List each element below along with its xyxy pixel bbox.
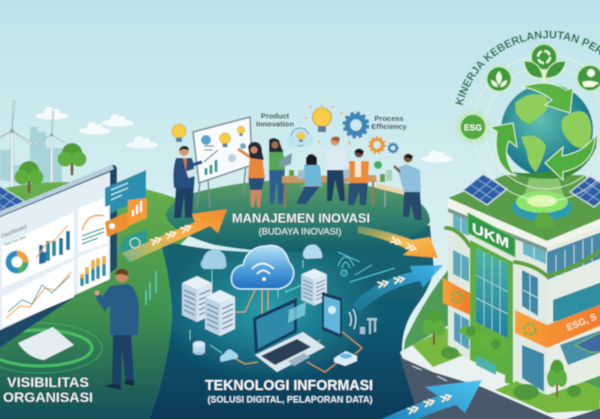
sparkles around bulb bbox=[305, 105, 350, 145]
servers bbox=[182, 269, 327, 336]
icon: bulb left bbox=[172, 124, 186, 142]
sprout bbox=[524, 61, 566, 82]
recycling arrows bbox=[490, 83, 597, 180]
UKM sign bbox=[468, 213, 515, 257]
sensors bbox=[360, 318, 377, 334]
sustainability icon: ESG bbox=[459, 113, 487, 141]
bushes on the ground bbox=[441, 347, 581, 400]
donut chart bbox=[8, 254, 26, 270]
right road bbox=[490, 404, 600, 419]
shield signal bbox=[338, 257, 354, 276]
label: product innovation: Product bbox=[261, 112, 290, 120]
cloud small lower bbox=[220, 349, 238, 362]
banner text: ESG, S bbox=[565, 312, 599, 334]
person viewing dashboard bbox=[94, 269, 139, 390]
database bbox=[193, 341, 205, 355]
glow behind technology group bbox=[160, 235, 380, 385]
panel: organisational visibility bbox=[0, 165, 156, 405]
panel: innovation management bbox=[172, 105, 422, 236]
right lawn bbox=[495, 368, 600, 413]
city skyline bbox=[0, 127, 62, 190]
heading: innovation management: MANAJEMEN INOVASI bbox=[232, 210, 370, 226]
left wall windows bbox=[453, 213, 546, 350]
card: line chart bbox=[2, 260, 74, 327]
card: donut and bars bbox=[2, 212, 74, 288]
whiteboard bbox=[193, 117, 252, 208]
callout bubbles bbox=[105, 170, 147, 262]
panel: information technology bbox=[182, 245, 395, 404]
standing man in white shirt bbox=[318, 136, 346, 201]
presenter in suit bbox=[173, 146, 202, 218]
title arc guide bbox=[462, 38, 600, 214]
subheading: innovation culture: (BUDAYA INOVASI) bbox=[258, 226, 342, 236]
orange banner left bbox=[443, 278, 470, 315]
monitor screen bbox=[0, 172, 110, 331]
icon: blue gear bbox=[344, 113, 368, 137]
monitor stand bbox=[18, 327, 74, 360]
icon: green leaf badge bbox=[374, 161, 382, 169]
arrow: blue to building bbox=[352, 265, 443, 312]
sign text: UKM bbox=[472, 221, 509, 252]
continents bbox=[515, 94, 592, 172]
right wall windows bbox=[522, 232, 600, 392]
label: process efficiency: Efficiency bbox=[371, 122, 408, 131]
roof bbox=[448, 175, 600, 252]
panel: sustainability performance bbox=[454, 30, 600, 202]
card: gauge and lines bbox=[78, 197, 108, 253]
wind turbines bbox=[0, 101, 68, 203]
clouds bbox=[36, 107, 453, 162]
halo rings bbox=[473, 55, 600, 201]
table with laptops bbox=[282, 169, 377, 207]
orange banner right bbox=[515, 304, 600, 348]
wifi arcs bbox=[349, 309, 356, 329]
card: donut and bars: Real time data bbox=[4, 235, 26, 247]
land: right green hill bbox=[395, 270, 600, 419]
bushes on canopy bbox=[466, 326, 501, 349]
sustainability icon: ESG: ESG bbox=[464, 122, 482, 132]
small cloud left bbox=[201, 249, 226, 269]
small cloud right bbox=[303, 245, 322, 259]
panel: dark technology ground bbox=[148, 225, 434, 419]
phone bbox=[322, 292, 342, 338]
globe bbox=[501, 84, 593, 176]
seated man in orange bbox=[348, 148, 369, 205]
monitor frame bbox=[0, 165, 117, 349]
card: stacked bars bbox=[78, 245, 108, 292]
panel: SME building bbox=[400, 165, 600, 419]
icon: thought cloud bbox=[287, 128, 313, 148]
building right wall bbox=[547, 226, 600, 395]
laptop bbox=[253, 298, 325, 372]
heading: information technology: TEKNOLOGI INFORMASI bbox=[205, 377, 373, 394]
plaza and road bbox=[400, 326, 600, 419]
green ring under monitor bbox=[0, 323, 102, 373]
solar panels on roof bbox=[463, 174, 600, 207]
bar chart bbox=[36, 225, 68, 264]
beacon pedestal bbox=[512, 165, 572, 230]
label: product innovation: Innovation bbox=[256, 120, 294, 128]
icon: small teal gear bbox=[388, 143, 398, 153]
sustainability icon: recycling bbox=[531, 44, 557, 70]
icon: orange gear bbox=[369, 137, 385, 153]
green canopy bbox=[458, 325, 510, 358]
vines bbox=[446, 228, 600, 276]
heading: organisational visibility: VISIBILITAS bbox=[7, 374, 89, 390]
solar panel left bbox=[0, 186, 24, 217]
sustainability icon: leaf bbox=[486, 66, 512, 92]
man at side table bbox=[394, 154, 422, 220]
lower canopy with solar bbox=[575, 332, 600, 352]
building left wall bbox=[448, 203, 547, 395]
dashboard heading: Dashboard bbox=[1, 224, 29, 240]
big cloud bbox=[231, 246, 294, 289]
heading: organisational visibility: ORGANISASI bbox=[3, 389, 93, 405]
network connection lines bbox=[190, 252, 395, 372]
trees on the hill bbox=[15, 143, 86, 193]
router bbox=[334, 351, 357, 366]
sustainability icon: money hand bbox=[577, 65, 600, 91]
vertical data lines bbox=[146, 271, 156, 305]
monitor top bezel bbox=[0, 165, 114, 217]
innovation platform bbox=[166, 180, 430, 252]
trees at the building bbox=[423, 310, 567, 397]
label: process efficiency: Process bbox=[374, 114, 404, 123]
land: left green hill bbox=[0, 182, 200, 419]
seated woman bbox=[296, 154, 323, 204]
woman in green with tablet bbox=[269, 138, 292, 204]
arrow: blue bottom bbox=[378, 380, 482, 419]
arrow: orange to innovation bbox=[122, 209, 227, 262]
arrow: orange to building bbox=[358, 226, 438, 258]
side table bbox=[376, 170, 412, 214]
woman in orange bbox=[238, 142, 265, 207]
icon: big bulb bbox=[313, 108, 331, 132]
subheading: digital solutions: (SOLUSI DIGITAL, PELAPORAN DATA) bbox=[208, 394, 372, 404]
green glazed entrance bbox=[470, 240, 513, 384]
